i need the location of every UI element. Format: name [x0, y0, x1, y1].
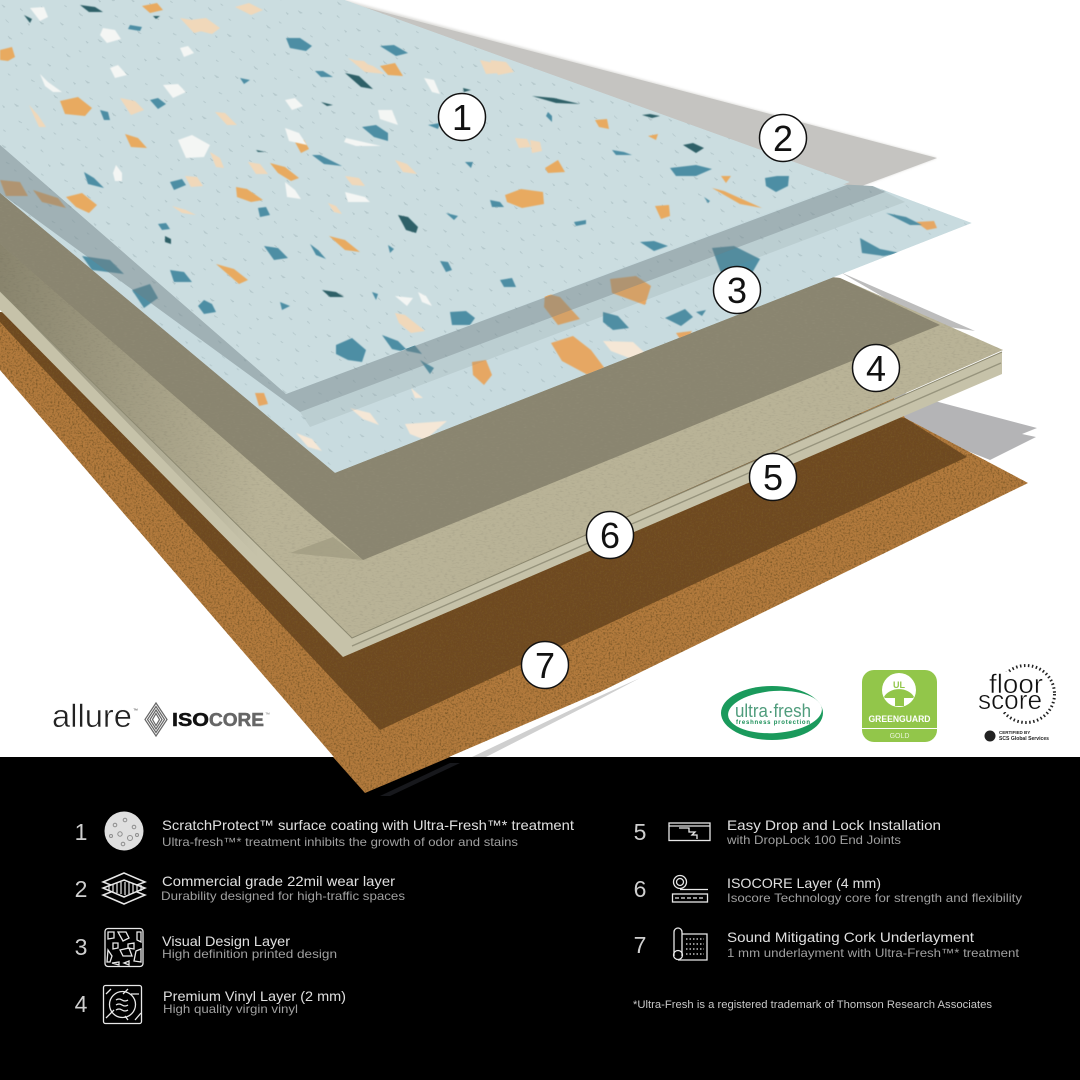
icon: cork roll — [674, 928, 707, 960]
logo: allure isocore: allure — [52, 698, 132, 734]
number badge 4 — [852, 344, 900, 392]
legend item 2 — [75, 873, 405, 904]
legend item 6: ISOCORE Layer (4 mm) — [727, 875, 881, 891]
legend item 4: High quality virgin vinyl — [163, 1002, 298, 1016]
layer 1 scratch protect surface — [0, 0, 860, 400]
layer 3 pale chips — [296, 341, 645, 451]
layer 4 to 6 vinyl and isocore board — [0, 185, 1003, 657]
icon: terrazzo pattern — [105, 928, 143, 966]
number badge 7: 7 — [535, 645, 555, 686]
number badge 3 — [714, 266, 760, 314]
legend item 4: 4 — [75, 991, 88, 1017]
icon: stacked wear layers — [103, 873, 145, 904]
legend item 4: Premium Vinyl Layer (2 mm) — [163, 988, 346, 1004]
layer 1 cast shadow — [0, 140, 885, 412]
logo: ultra-fresh: ultra·fresh — [735, 701, 811, 721]
number badge 3: 3 — [727, 270, 747, 311]
panel: legend — [0, 757, 1080, 1080]
logo: allure isocore: ™ — [265, 712, 270, 718]
dark chips — [24, 5, 704, 297]
number badge 6: 6 — [600, 515, 620, 556]
logo: allure isocore: CORE — [209, 710, 264, 730]
layer 7 cork underlayment — [0, 312, 1028, 793]
logo: floorscore: floor — [989, 669, 1043, 699]
layer 3 teal chips — [82, 213, 922, 374]
logo: UL greenguard gold: GOLD — [890, 733, 909, 740]
legend item 7 — [634, 928, 1020, 960]
layer 2 wear layer sheet — [345, 0, 937, 194]
logo: allure isocore: ISO — [172, 710, 209, 730]
number badge 6 — [586, 512, 634, 558]
legend item 7: 7 — [634, 932, 646, 958]
icon: isocore diamond — [145, 703, 167, 736]
number badge 4: 4 — [866, 348, 886, 389]
logo: allure isocore: ™ — [133, 708, 138, 714]
legend item 3 — [75, 928, 337, 966]
logo: UL greenguard gold: UL — [893, 680, 905, 690]
legend item 5 — [634, 817, 941, 847]
legend item 6 — [634, 875, 1022, 905]
legend item 7: 1 mm underlayment with Ultra-Fresh™* treatment — [727, 946, 1020, 960]
number badge 2 — [760, 114, 806, 162]
number badge 1 — [438, 94, 486, 140]
legend item 2: Commercial grade 22mil wear layer — [162, 873, 395, 889]
logo: UL greenguard gold — [862, 670, 937, 742]
legend item 3: 3 — [75, 934, 87, 960]
logo: floorscore: SCS Global Services — [999, 736, 1049, 742]
number badge 2: 2 — [773, 118, 793, 159]
footnote: *Ultra-Fresh is a registered trademark of Thomson Research Associates — [633, 999, 993, 1011]
number badge 5 — [750, 454, 796, 500]
lower grey sheets — [893, 390, 1037, 460]
pale shadow band — [300, 192, 905, 427]
icon: isocore roll — [672, 876, 708, 902]
legend item 6: Isocore Technology core for strength and flexibility — [727, 891, 1022, 905]
white chips — [30, 7, 440, 306]
orange chips — [0, 3, 762, 284]
icon: vinyl disc — [104, 986, 142, 1024]
logo: UL greenguard gold: GREENGUARD — [868, 714, 931, 724]
icon: drop and lock joint — [669, 823, 710, 840]
logo: floorscore: CERTIFIED BY — [999, 730, 1030, 735]
logo: floorscore: score — [978, 685, 1042, 715]
legend item 2: 2 — [75, 876, 87, 902]
legend item 5: 5 — [634, 819, 646, 845]
logo: allure isocore — [52, 698, 270, 736]
layer 3 orange chips — [0, 180, 937, 406]
logo: floorscore — [978, 666, 1054, 742]
number badge 7 — [522, 642, 568, 688]
logo: ultra-fresh — [721, 686, 823, 740]
legend item 3: Visual Design Layer — [162, 933, 290, 949]
panel: exploded floor layers — [0, 0, 1037, 793]
legend item 5: with DropLock 100 End Joints — [726, 833, 901, 847]
logo: ultra-fresh: freshness protection — [736, 720, 810, 726]
teal chips — [84, 25, 789, 362]
legend item 1 — [75, 812, 574, 850]
icon: coating droplets — [104, 812, 144, 850]
legend item 1: 1 — [75, 819, 87, 845]
legend item 7: Sound Mitigating Cork Underlayment — [727, 929, 974, 945]
layer 3 visual design layer — [0, 130, 980, 480]
legend item 4 — [75, 986, 346, 1024]
legend item 5: Easy Drop and Lock Installation — [727, 817, 941, 833]
number badge 1: 1 — [452, 97, 472, 138]
pale peach chips — [29, 3, 542, 333]
legend item 3: High definition printed design — [162, 947, 337, 961]
legend item 6: 6 — [634, 876, 646, 902]
middle grey sheet — [840, 272, 975, 331]
legend item 1: Ultra-fresh™* treatment inhibits the growth of odor and stains — [162, 835, 518, 849]
layer 7 cork tip over legend — [333, 757, 460, 796]
legend item 1: ScratchProtect™ surface coating with Ultra-Fresh™* treatment — [162, 817, 574, 833]
legend item 2: Durability designed for high-traffic spaces — [161, 889, 405, 903]
number badge 5: 5 — [763, 457, 783, 498]
